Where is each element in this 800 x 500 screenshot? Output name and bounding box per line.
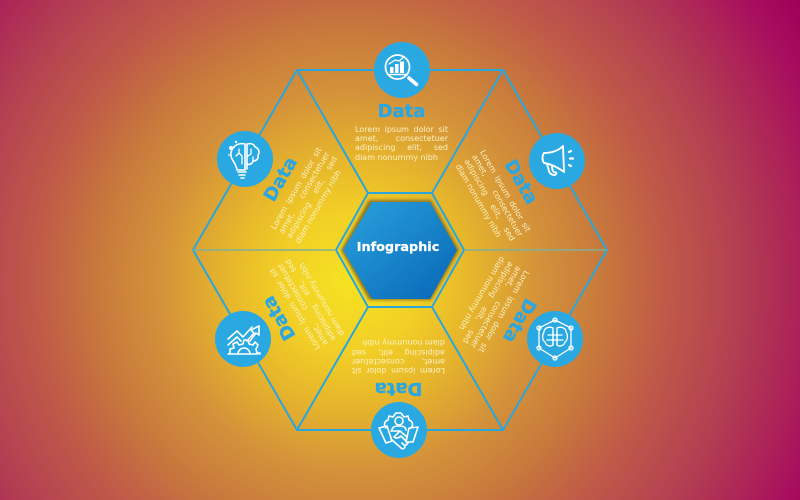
text block: diam nonummy nibh [293, 168, 342, 245]
text block: diam nonummy nibh [355, 153, 438, 162]
text block [458, 255, 531, 354]
text block: diam nonummy nibh [362, 338, 445, 347]
text block: adipiscing elit, sed [285, 155, 339, 240]
center hexagon [340, 198, 460, 302]
text block [454, 148, 533, 243]
heading: Data [375, 378, 422, 399]
text block: Lorem ipsum dolor sit [477, 269, 531, 354]
icon: megaphone [529, 133, 585, 189]
center hexagon: Infographic [357, 240, 439, 255]
heading: Data [500, 156, 542, 208]
text block: Lorem ipsum dolor sit [352, 366, 445, 376]
heading: Data [498, 295, 540, 347]
icon: growth arrow with gear [215, 311, 271, 367]
text block: Lorem ipsum dolor sit [478, 148, 533, 233]
text block: Lorem ipsum dolor sit [269, 146, 323, 231]
text block: amet, consectetuer [470, 153, 525, 238]
heading: Data [260, 153, 302, 205]
heading: Data [258, 292, 300, 344]
text block: amet, consectetuer [352, 357, 445, 366]
text block: adipiscing elit, sed [284, 257, 338, 342]
text block: diam nonummy nibh [454, 162, 503, 239]
icon: magnifier with bar chart [374, 42, 430, 98]
text block [269, 146, 342, 245]
text block [267, 257, 346, 352]
icon: brain network [527, 311, 583, 367]
text block: diam nonummy nibh [297, 261, 346, 338]
text block [352, 338, 445, 376]
text block: Lorem ipsum dolor sit [267, 267, 322, 352]
panel: lower left segment [258, 257, 346, 352]
text block: adipiscing elit, sed [352, 348, 445, 357]
text block: adipiscing elit, sed [461, 260, 515, 345]
text block: amet, consectetuer [355, 134, 448, 143]
text block: amet, consectetuer [469, 265, 523, 350]
icon: lightbulb with brain [217, 131, 273, 187]
panel: upper right segment [454, 148, 542, 243]
icon: handshake with gear [371, 402, 427, 458]
panel: bottom segment [352, 338, 445, 399]
text block: amet, consectetuer [277, 150, 331, 235]
panel: top segment [355, 101, 448, 162]
text block: adipiscing elit, sed [355, 143, 448, 152]
text block [355, 124, 448, 162]
panel: lower right segment [458, 255, 540, 354]
text block: amet, consectetuer [275, 262, 330, 347]
heading: Data [378, 101, 425, 122]
text block: Lorem ipsum dolor sit [355, 124, 448, 134]
panel: upper left segment [260, 146, 342, 245]
text block: adipiscing elit, sed [462, 158, 516, 243]
text block: diam nonummy nibh [458, 255, 507, 332]
